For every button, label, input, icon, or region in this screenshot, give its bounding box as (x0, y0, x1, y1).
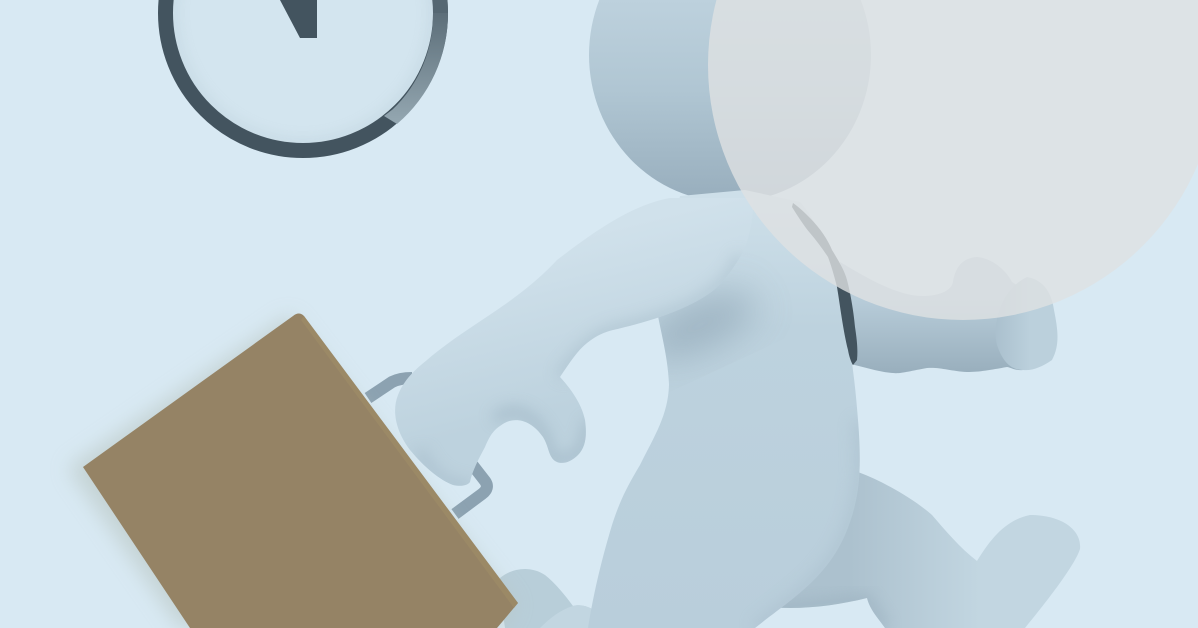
icon: briefcase (83, 314, 518, 628)
figure: arm holding watch (840, 257, 1058, 373)
figure: arm holding briefcase (395, 213, 707, 486)
figure: back leg (781, 472, 1080, 628)
speech bubble circle (708, 0, 1198, 320)
figure: front foot (498, 569, 622, 628)
shadow: briefcase (68, 315, 515, 628)
figure: torso (580, 190, 870, 628)
icon: tie (792, 203, 857, 365)
figure: briefcase handles (368, 378, 487, 514)
figure: head (589, 0, 871, 202)
figure: fist (996, 277, 1058, 370)
icon: clock (166, 0, 448, 150)
